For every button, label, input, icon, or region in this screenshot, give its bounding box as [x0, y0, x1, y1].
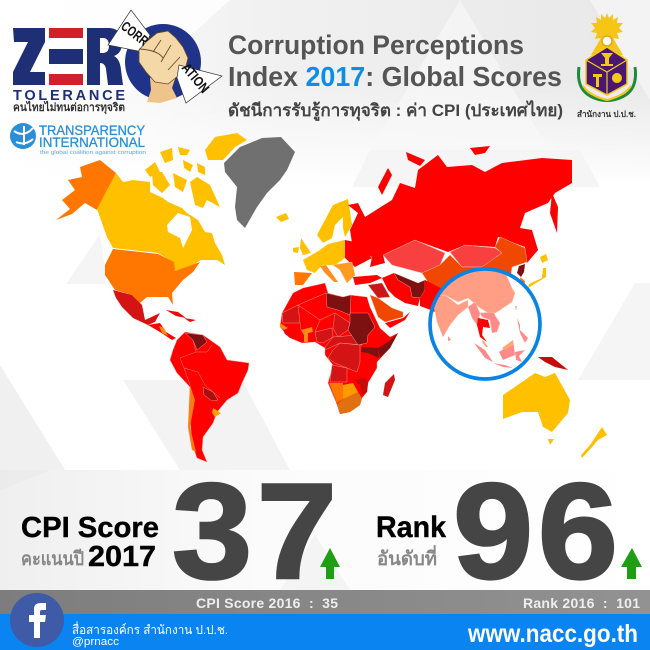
- year: 2017: [88, 541, 156, 573]
- nigeria: [315, 328, 333, 343]
- china highlight: [440, 270, 516, 314]
- cpi score label: CPI Score: [21, 512, 159, 544]
- balkans: [333, 262, 355, 283]
- myanmar highlight: [468, 302, 480, 326]
- mongolia: [450, 245, 502, 267]
- japan: [528, 254, 548, 288]
- thai year label: คะแนนปี: [21, 548, 84, 570]
- mozambique: [355, 378, 368, 395]
- highlight circle: [430, 269, 540, 379]
- highlight circle fill: [430, 269, 540, 379]
- iran: [382, 273, 420, 306]
- new zealand: [581, 427, 607, 458]
- canada mainland: [97, 173, 225, 271]
- world map: [56, 133, 607, 462]
- south africa: [337, 392, 362, 414]
- botswana: [343, 383, 358, 399]
- paper top: [108, 10, 150, 52]
- paper bottom: [177, 65, 222, 103]
- alaska: [56, 160, 116, 220]
- libya: [326, 293, 351, 315]
- ti name line 1: TRANSPARENCY: [39, 122, 146, 138]
- mexico: [113, 290, 160, 325]
- south america: [170, 332, 249, 462]
- india highlight: [433, 295, 468, 337]
- rank number: 9: [453, 455, 533, 607]
- score number: 3: [172, 455, 252, 607]
- highlighted asia: [433, 270, 528, 368]
- papua new guinea: [538, 357, 568, 370]
- cpi score block: [21, 455, 337, 607]
- canadian arctic islands: [145, 133, 247, 208]
- malay peninsula: [482, 340, 488, 347]
- handle: @prnacc: [72, 636, 120, 648]
- up arrow rank: [621, 548, 642, 579]
- namibia: [329, 383, 343, 403]
- finger lines: [139, 40, 180, 70]
- uruguay: [212, 408, 221, 417]
- wrist: [147, 76, 177, 103]
- cpi 2016: CPI Score 2016 : 35: [196, 595, 338, 611]
- korea south: [520, 277, 525, 286]
- turkey: [353, 275, 382, 285]
- philippines: [517, 318, 528, 343]
- ti name line 2: INTERNATIONAL: [39, 134, 145, 150]
- title line 1: Corruption Perceptions: [228, 30, 524, 60]
- yellow ribbon: [583, 86, 631, 100]
- letter e flag: [49, 28, 83, 85]
- up arrow score: [320, 548, 340, 579]
- yemen oman: [385, 312, 410, 328]
- green wreath: [578, 67, 636, 100]
- letter o: [125, 24, 201, 100]
- iceland: [276, 213, 289, 222]
- indochina highlight: [480, 312, 500, 333]
- nacc caption: สำนักงาน ป.ป.ช.: [577, 109, 636, 119]
- scandinavia: [317, 199, 352, 243]
- sudan: [348, 313, 375, 345]
- kamchatka and arctic islands: [378, 146, 558, 252]
- hudson bay: [167, 213, 192, 248]
- uk and ireland: [293, 238, 311, 255]
- sulawesi: [515, 350, 525, 362]
- guinea coast: [283, 330, 293, 338]
- senegal ghana orange: [280, 323, 313, 342]
- south america borders: [180, 340, 220, 398]
- chile: [188, 385, 196, 452]
- logo: nacc emblem: [577, 13, 636, 119]
- swirl: [602, 36, 612, 46]
- sun rays: [591, 13, 623, 55]
- logo: zero tolerance: [13, 10, 222, 115]
- shield lines: [586, 60, 627, 95]
- madagascar: [383, 374, 395, 397]
- thai rank label: อันดับที่: [377, 545, 437, 570]
- angola: [330, 365, 347, 382]
- purple shield: [586, 47, 627, 95]
- pakistan: [420, 280, 445, 312]
- thai org name: สื่อสารองค์กร สำนักงาน ป.ป.ช.: [72, 621, 228, 637]
- title: [228, 30, 563, 122]
- rank number: 6: [538, 455, 618, 607]
- africa borders: [298, 293, 335, 332]
- paraguay: [203, 387, 218, 401]
- rank label: Rank: [376, 511, 446, 544]
- title line 2: Index 2017: Global Scores: [228, 61, 562, 92]
- spain: [294, 272, 312, 285]
- logo: transparency international: [10, 122, 146, 156]
- tolerance: TOLERANCE: [13, 88, 125, 104]
- west europe: [303, 240, 345, 273]
- thai subtitle: ดัชนีการรับรู้การทุจริต : ค่า CPI (ประเทศไทย): [228, 100, 563, 122]
- taiwan: [515, 306, 517, 311]
- greenland: [224, 137, 295, 228]
- africa: [280, 283, 398, 414]
- italy: [320, 265, 338, 282]
- drc: [328, 343, 360, 372]
- thai slogan: คนไทยไม่ทนต่อการทุจริต: [13, 100, 125, 115]
- word corruption bottom: ATION: [179, 60, 213, 96]
- central african belt: [325, 335, 362, 350]
- rank 2016: Rank 2016 : 101: [523, 595, 640, 611]
- word corruption top: CORR: [118, 18, 152, 49]
- icon: facebook: [10, 593, 64, 647]
- score number: 7: [257, 455, 337, 607]
- somalia: [378, 333, 398, 358]
- kazakhstan and central asia: [383, 240, 445, 273]
- chad: [333, 313, 350, 337]
- letter r: [87, 28, 123, 85]
- iraq syria: [368, 283, 390, 298]
- ti globe icon: [10, 123, 36, 149]
- saudi arabia: [370, 295, 403, 322]
- usa: [105, 249, 200, 305]
- ti tagline: the global coalition against corruption: [40, 150, 146, 156]
- sri lanka: [448, 336, 451, 341]
- rank block: [376, 455, 618, 607]
- shield symbols: [593, 53, 622, 87]
- east europe: [345, 240, 372, 267]
- mauritania: [282, 305, 300, 323]
- caribbean: [166, 310, 196, 322]
- kenya: [361, 347, 379, 358]
- korea north: [517, 264, 525, 277]
- central america: [148, 323, 176, 340]
- java: [493, 363, 513, 368]
- blue footer: [0, 614, 650, 650]
- costa rica panama: [159, 326, 168, 336]
- grey bar: [0, 590, 650, 614]
- borneo: [499, 340, 515, 360]
- china north: [422, 237, 527, 290]
- russia: [348, 155, 572, 267]
- letter z: [13, 28, 45, 85]
- borneo malaysia: [502, 340, 513, 350]
- pakistan edge: [433, 296, 443, 312]
- venezuela: [185, 333, 207, 350]
- afghanistan turkmenistan: [394, 273, 425, 298]
- thailand: [477, 318, 490, 342]
- tasmania: [548, 439, 554, 445]
- sumatra: [474, 343, 493, 362]
- fist: [139, 31, 188, 84]
- australia: [503, 373, 570, 432]
